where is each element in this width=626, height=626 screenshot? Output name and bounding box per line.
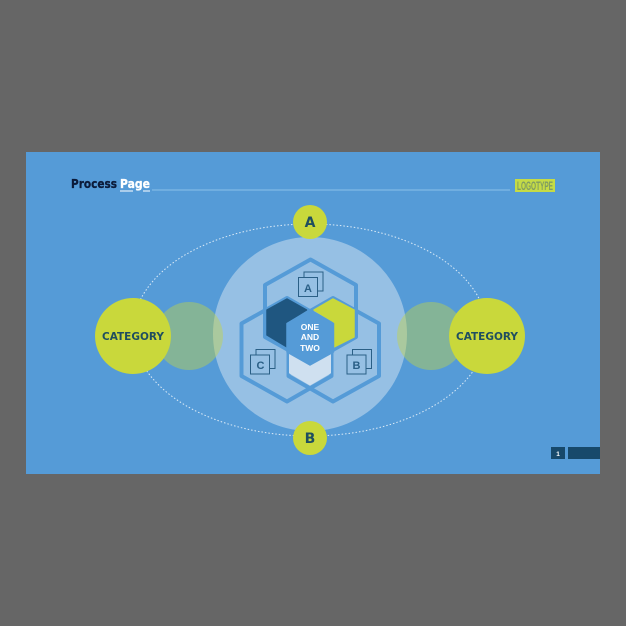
header rule: [152, 190, 510, 191]
right category circle: CATEGORY: [456, 330, 519, 343]
center hexagon: ONE: [301, 322, 320, 332]
logotype badge: [515, 179, 555, 193]
page number box: [551, 447, 565, 459]
panel: blue slide: [26, 152, 600, 474]
lime overlap segment: [314, 299, 354, 347]
hexagon outline A: [265, 260, 356, 362]
icon: stacked squares A: A: [304, 283, 312, 295]
badge A: A: [305, 215, 316, 231]
hexagon outline C: [242, 298, 332, 402]
light overlap segment: [290, 353, 330, 385]
icon: stacked squares B: B: [353, 360, 361, 372]
left translucent circle: [155, 302, 223, 370]
logotype badge: LOGOTYPE: [517, 179, 553, 193]
hexagon venn diagram: [242, 260, 379, 402]
dark overlap segment: [267, 299, 306, 347]
icon: stacked squares A: [298, 272, 323, 296]
left category circle: [95, 298, 171, 374]
dotted orbit ellipse: [133, 224, 487, 436]
left category circle: CATEGORY: [102, 330, 165, 343]
badge B: B: [305, 431, 315, 447]
hexagon outline B: [288, 298, 379, 402]
title: Page: [120, 176, 150, 191]
badge A: [293, 205, 327, 239]
badge B: [293, 421, 327, 455]
center hexagon: AND: [301, 332, 319, 342]
title: Process: [71, 176, 117, 191]
right translucent circle: [397, 302, 465, 370]
icon: stacked squares B: [347, 350, 372, 374]
title: [71, 176, 150, 192]
icon: stacked squares C: [250, 350, 275, 374]
center hexagon: [287, 310, 334, 365]
large pale circle: [213, 237, 407, 431]
icon: stacked squares C: C: [257, 360, 265, 372]
center hexagon: TWO: [300, 343, 320, 353]
page number box: 1: [556, 451, 560, 458]
page footer bar: [568, 447, 600, 459]
right category circle: [449, 298, 525, 374]
